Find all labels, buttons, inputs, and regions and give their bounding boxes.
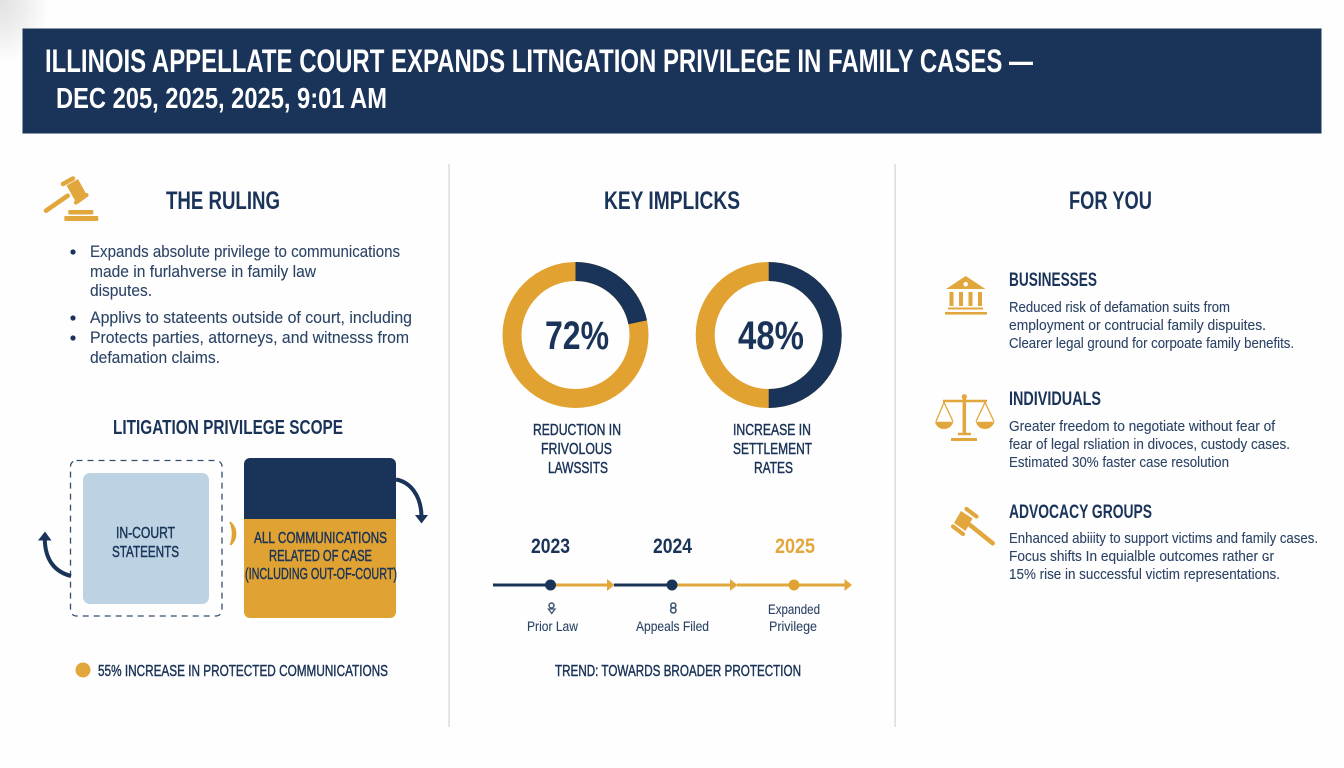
icon: bank building	[945, 276, 987, 315]
diagram: all communications box: (INCLUDING OUT-OF-COURT)	[245, 566, 397, 583]
diagram: all communications box	[244, 458, 397, 618]
label: reduction in frivolous lawsuits: FRIVOLOUS	[541, 441, 612, 458]
businesses text	[1009, 270, 1294, 352]
panel: the ruling	[38, 178, 428, 680]
businesses text: BUSINESSES	[1009, 270, 1097, 291]
arrow: left curved up	[38, 532, 71, 576]
ruling bullet list: Protects parties, attorneys, and witnesss from	[90, 328, 409, 347]
advocacy groups text: ADVOCACY GROUPS	[1009, 502, 1152, 523]
ruling bullet list	[70, 242, 412, 367]
ruling bullet list: disputes.	[90, 281, 152, 300]
panel: key implications	[493, 187, 852, 680]
timeline: Prior Law	[527, 618, 579, 634]
ruling bullet list: made in furlahverse in family law	[90, 262, 317, 281]
diagram: all communications box: RELATED OF CASE	[269, 548, 372, 565]
label: reduction in frivolous lawsuits: LAWSSITS	[548, 460, 608, 477]
timeline: 2025	[775, 535, 815, 558]
individuals text	[1009, 389, 1290, 471]
ruling bullet list: Applivs to stateents outside of court, including	[90, 308, 412, 327]
diagram: all communications box: ALL COMMUNICATIONS	[254, 530, 387, 547]
businesses text: employment or contrucial family dispuites.	[1009, 317, 1266, 334]
label: increase in settlement rates: SETTLEMENT	[733, 441, 812, 458]
ruling bullet list: defamation claims.	[90, 348, 220, 367]
label: reduction in frivolous lawsuits	[533, 422, 621, 477]
timeline: Privilege	[769, 618, 817, 634]
businesses text: Reduced risk of defamation suits from	[1009, 299, 1230, 316]
heading: the ruling: THE RULING	[166, 187, 280, 215]
label: increase in settlement rates	[733, 422, 812, 477]
advocacy groups text: Focus shifts In equialble outcomes rather ɢr	[1009, 548, 1274, 565]
callout: protected communications: 55% INCREASE IN PROTECTED COMMUNICATIONS	[98, 663, 388, 680]
arrow: right curved down	[396, 480, 428, 524]
label: increase in settlement rates: INCREASE IN	[733, 422, 811, 439]
trend caption: TREND: TOWARDS BROADER PROTECTION	[555, 663, 801, 680]
individuals text: fear of legal rsliation in divoces, custody cases.	[1009, 436, 1290, 453]
panel: for you	[935, 187, 1318, 583]
ruling bullet list: Expands absolute privilege to communications	[90, 242, 400, 261]
diagram: in-court box: IN-COURT	[116, 525, 175, 542]
advocacy groups text: 15% rise in successful victim representations.	[1009, 566, 1280, 583]
icon: gavel	[46, 178, 98, 221]
timeline: Appeals Filed	[636, 618, 709, 634]
heading: for you: FOR YOU	[1069, 187, 1152, 215]
diagram: in-court box	[70, 460, 222, 616]
advocacy groups text	[1009, 502, 1318, 583]
businesses text: Clearer legal ground for corpoate family benefits.	[1009, 335, 1294, 352]
icon: scales of justice	[935, 394, 994, 440]
donut chart: 72%	[512, 272, 639, 398]
icon: gold bracket connector	[230, 522, 236, 545]
individuals text: INDIVIDUALS	[1009, 389, 1101, 410]
label: reduction in frivolous lawsuits: REDUCTION IN	[533, 422, 621, 439]
title: ILLINOIS APPELLATE COURT EXPANDS LITNGATION PRIVILEGE IN FAMILY CASES —	[45, 43, 1033, 79]
individuals text: Estimated 30% faster case resolution	[1009, 454, 1229, 471]
timeline	[493, 535, 852, 634]
icon: gavel small	[953, 509, 993, 543]
donut chart: 48%: 48%	[738, 314, 804, 358]
callout: protected communications	[76, 662, 388, 680]
date line: DEC 205, 2025, 2025, 9:01 AM	[56, 83, 387, 115]
header banner	[22, 28, 1322, 134]
heading: key implicks: KEY IMPLICKS	[604, 187, 740, 215]
heading: litigation privilege scope: LITIGATION PRIVILEGE SCOPE	[113, 417, 343, 439]
timeline: 2023	[531, 535, 570, 558]
donut chart: 48%	[705, 272, 832, 398]
timeline: 2024	[653, 535, 692, 558]
timeline: Expanded	[768, 601, 820, 617]
individuals text: Greater freedom to negotiate without fear of	[1009, 418, 1276, 435]
diagram: in-court box: STATEENTS	[112, 544, 179, 561]
label: increase in settlement rates: RATES	[754, 460, 793, 477]
donut chart: 72%: 72%	[545, 314, 609, 358]
